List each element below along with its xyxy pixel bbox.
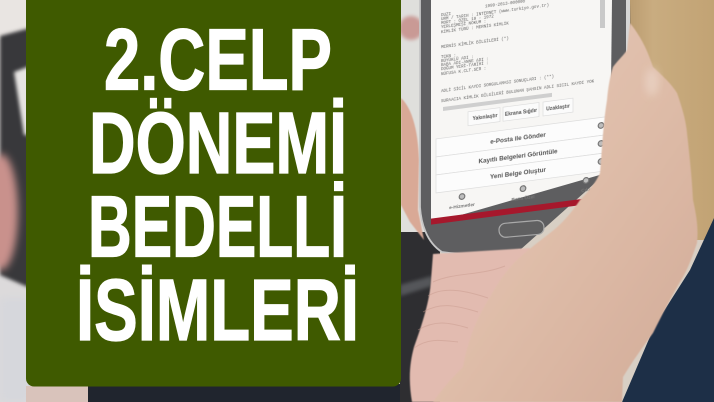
document text: ADLİ SİCİL KAYDI SORGULAMASI SONUÇLARI : (**) [441, 75, 554, 94]
document text [441, 0, 595, 104]
document text: BABA ADI-ANNE ADI : [441, 57, 489, 68]
horizontal scrollbar [443, 93, 552, 111]
screen buttons: Yakınlaştır [473, 113, 498, 122]
title text: İSİMLERİ [76, 262, 359, 359]
document text: MERNİS KİMLİK BİLGİLERİ (*) [441, 36, 509, 50]
document text: YERLEŞMESİ NOKUM : [441, 19, 486, 30]
title panel [26, 0, 401, 386]
title text: 2.CELP [104, 12, 332, 108]
sleeve [622, 218, 714, 402]
phone home button [498, 220, 545, 238]
phone [420, 0, 632, 254]
scrollbar [600, 0, 605, 28]
background photo: blurred left side [0, 0, 418, 402]
title text: BEDELLİ [88, 178, 347, 276]
document text: NÜFUSA K.CLT.SER : [441, 66, 486, 77]
phone screen [431, 0, 612, 225]
screen buttons: Uzaklaştır [546, 104, 570, 113]
document text: DUZI [441, 12, 452, 18]
document text: BÜYÜKLÜ ADI : [441, 55, 474, 64]
document text: TCKN : [441, 53, 456, 60]
thumb and hand [433, 23, 698, 402]
screen buttons: e-Posta ile Gönder [490, 132, 546, 146]
title text: DÖNEMİ [89, 95, 347, 192]
document text: DOĞUM YERİ-TARİHİ : [441, 61, 489, 72]
document text: SURAACIA KİMLİK BİLGİLERİ BULUNAN ŞAHSIN ADLI SICIL KAYDI YOK [441, 79, 595, 104]
document text: URM / TARIH : INTERNET (www.turkiye.gov.tr) [441, 3, 549, 22]
document text: KİMLİK TÜRÜ : MERNİS KİMLİK [441, 21, 509, 35]
red footer band [431, 196, 601, 225]
screen buttons: Bana Özel [511, 193, 535, 203]
screen buttons: e-Hizmetler [449, 202, 475, 211]
screen slanted content [431, 0, 606, 225]
palm [410, 248, 530, 402]
screen buttons: Ekrana Sığdır [505, 108, 537, 118]
screen buttons: Çıkış [581, 187, 593, 194]
fingers left of phone [401, 98, 424, 240]
thumb highlight [645, 68, 659, 96]
background photo: right side wall [399, 0, 714, 402]
document text: MORT : ÖZEL 19 - 1972 [441, 14, 494, 26]
screen buttons: Kayıtlı Belgeleri Görüntüle [479, 148, 558, 165]
screen buttons [436, 94, 606, 213]
title text [76, 12, 359, 359]
screen buttons: Yeni Belge Oluştur [490, 167, 546, 181]
